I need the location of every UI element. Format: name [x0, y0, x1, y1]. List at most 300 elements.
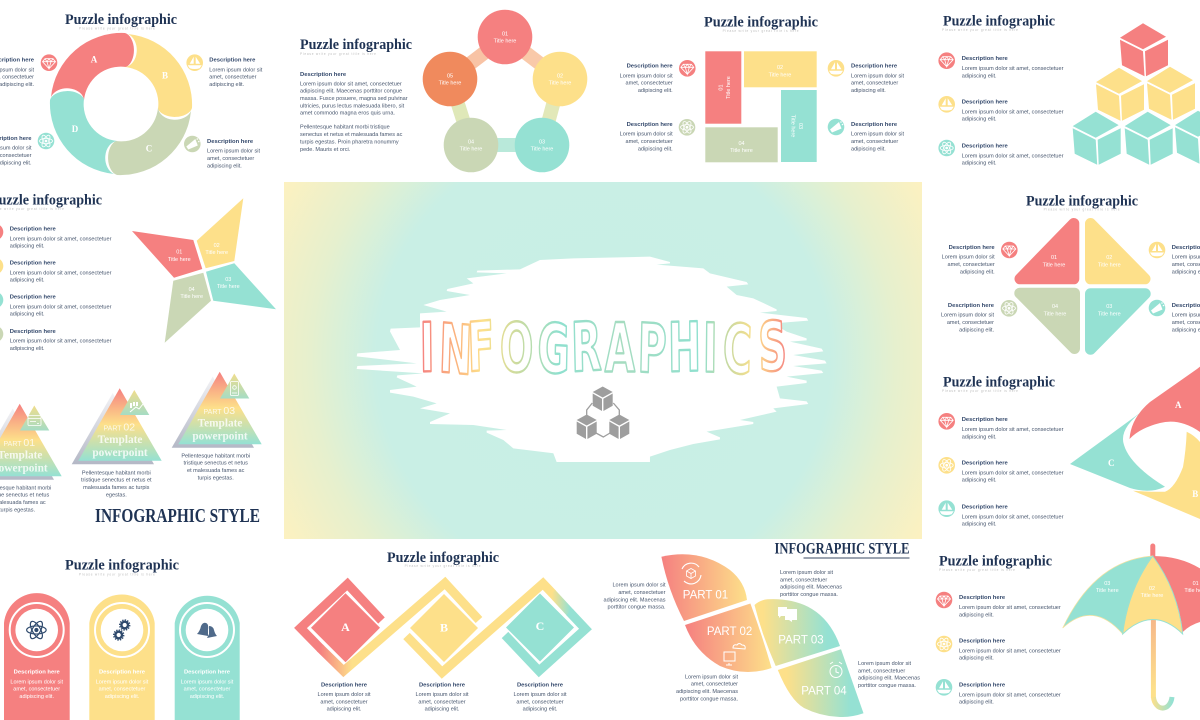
text block left top: Lorem ipsum dolor sit — [620, 73, 673, 79]
ring letters — [72, 54, 168, 154]
text block bottom right: adipiscing elit. — [207, 164, 242, 170]
text item 1: adipiscing elit. — [959, 612, 994, 618]
panel: diamond chain — [300, 550, 586, 713]
diamond C: C — [536, 619, 544, 633]
triangle part 03: Template — [198, 418, 242, 430]
text block top left: adipiscing elit. — [0, 82, 34, 88]
white brush stroke — [357, 257, 827, 462]
text block top left — [0, 58, 35, 88]
icon: ship — [186, 54, 203, 71]
circle 03 — [515, 118, 569, 172]
text block top right: amet, consectetuer — [209, 75, 257, 81]
arch red: Description here — [14, 669, 61, 675]
icon: connected cubes — [577, 386, 629, 439]
text item 3: adipiscing elit. — [10, 312, 45, 318]
circle 05 — [423, 52, 477, 106]
panel: pentagon circles — [300, 10, 587, 172]
panel: pinwheel star — [0, 192, 276, 352]
swirl A — [1130, 362, 1200, 440]
text item 2: Lorem ipsum dolor sit amet, consectetuer — [962, 470, 1064, 476]
text item 2: Description here — [962, 460, 1009, 466]
subtitle: Please write your great title is here — [723, 29, 799, 33]
text block bottom right: amet, consectetuer — [207, 156, 254, 162]
text left bottom — [941, 303, 995, 333]
quadrant 04: Title here — [1044, 312, 1066, 318]
icon: diamond — [41, 54, 57, 71]
text right: adipiscing elit. Maecenas — [858, 676, 920, 682]
icon: atom — [936, 636, 952, 652]
icon: ship — [936, 679, 952, 696]
block 01: Title here — [726, 76, 732, 99]
text item 2: Lorem ipsum dolor sit amet, consectetuer — [10, 270, 112, 276]
description: Lorem ipsum dolor sit amet, consectetuer — [300, 81, 402, 87]
quadrant 04 — [1020, 293, 1074, 348]
text item 2 — [10, 261, 112, 284]
text item 3: adipiscing elit. — [959, 700, 994, 706]
panel: rectangles puzzle — [620, 14, 904, 162]
text item 3: Lorem ipsum dolor sit amet, consectetuer — [959, 692, 1061, 698]
text item 3: Lorem ipsum dolor sit amet, consectetuer — [962, 153, 1064, 159]
icon: megaphone — [828, 119, 844, 135]
text item 1: Description here — [10, 227, 57, 233]
arch red — [4, 593, 70, 720]
text C: adipiscing elit. — [523, 707, 558, 713]
panel: cube pyramid — [938, 14, 1200, 167]
leaf part 04: PART 04 — [801, 685, 847, 697]
block 02: Title here — [769, 72, 791, 78]
text C: Lorem ipsum dolor sit — [513, 692, 567, 698]
text B: amet, consectetuer — [418, 699, 466, 705]
text item 3 — [10, 295, 112, 318]
description: senectus et netus et malesuada fames ac — [300, 132, 403, 138]
text item 3 — [962, 143, 1064, 167]
swirl letters — [1108, 400, 1198, 499]
text right — [858, 661, 920, 689]
diamond A — [311, 593, 380, 662]
text bottom — [676, 674, 738, 702]
leaf part 01: PART 01 — [683, 589, 728, 601]
text item 2: Lorem ipsum dolor sit amet, consectetuer — [959, 648, 1061, 654]
blade 03 — [206, 263, 276, 309]
text left: porttitor congue massa. — [608, 605, 666, 611]
icon: ship — [1149, 242, 1165, 258]
quadrant 01: 01 — [1051, 255, 1057, 261]
text block right top — [851, 64, 904, 94]
title: Puzzle infographic — [65, 12, 177, 28]
panel: umbrella — [936, 544, 1200, 708]
text left top: amet, consectetuer — [948, 262, 995, 268]
blade 04: Title here — [180, 294, 203, 300]
heading: INFOGRAPHIC STYLE — [95, 505, 260, 527]
text item 1: adipiscing elit. — [962, 73, 997, 79]
title: Puzzle infographic — [387, 550, 499, 566]
description — [300, 72, 408, 153]
block 03: 03 — [797, 123, 803, 129]
circle 04 — [444, 118, 498, 172]
block 02 — [744, 51, 817, 87]
text left bottom: Lorem ipsum dolor sit — [941, 313, 994, 319]
blade 01 — [132, 231, 202, 278]
diamond B — [410, 594, 478, 662]
canopy yellow: 02 — [1149, 586, 1155, 592]
circle 01: 01 — [502, 32, 508, 38]
text item 2: adipiscing elit. — [10, 278, 45, 284]
text left top: Lorem ipsum dolor sit — [942, 255, 995, 261]
panel: leaf parts — [604, 540, 920, 717]
swirl letters: B — [1192, 489, 1198, 499]
arch teal: adipiscing elit. — [190, 694, 225, 700]
block 01 — [705, 51, 741, 124]
text block top right: adipiscing elit. — [209, 82, 245, 88]
icon: atom — [1001, 300, 1017, 317]
ring segment D — [50, 91, 117, 174]
zigzag bands — [300, 583, 586, 672]
panel: arches — [4, 558, 240, 720]
text bottom: amet, consectetuer — [691, 682, 738, 688]
arch teal: Description here — [184, 669, 231, 675]
text left: Lorem ipsum dolor sit — [612, 583, 666, 589]
leaf part 03 — [754, 599, 840, 666]
circle 02: 02 — [557, 74, 563, 80]
text item 3: Lorem ipsum dolor sit amet, consectetuer — [962, 514, 1064, 520]
text block top right: Lorem ipsum dolor sit — [209, 67, 263, 73]
canopy yellow: Title here — [1141, 593, 1163, 599]
text block right top: Lorem ipsum dolor sit — [851, 73, 904, 79]
text block top right — [209, 58, 263, 88]
arch teal: Lorem ipsum dolor sit — [181, 679, 234, 685]
text item 2 — [962, 99, 1064, 123]
diamond A: A — [341, 620, 350, 634]
canopy labels 01 — [1184, 581, 1200, 594]
arch red: Lorem ipsum dolor sit — [10, 679, 63, 685]
text left: amet, consectetuer — [618, 590, 666, 596]
leaf part 02 — [685, 604, 772, 672]
text block left bottom: Description here — [627, 122, 673, 128]
text C: Description here — [517, 683, 564, 689]
arch teal: amet, consectetuer — [184, 687, 231, 693]
quadrant 01 — [1020, 224, 1074, 279]
ring letters: C — [146, 144, 152, 154]
ring segment B — [125, 34, 192, 117]
text item 2: Lorem ipsum dolor sit amet, consectetuer — [962, 109, 1064, 115]
block 04 — [705, 127, 778, 162]
text item 3 — [962, 504, 1064, 528]
icon: atom — [38, 133, 54, 149]
text B — [415, 683, 469, 713]
text block left top: adipiscing elit. — [638, 88, 673, 94]
circle 01 — [478, 10, 532, 64]
caption part 02: malesuada fames ac turpis — [83, 485, 150, 491]
blade 03: 03 — [225, 277, 231, 283]
quadrant 03: 03 — [1106, 304, 1112, 310]
title: Puzzle infographic — [300, 37, 412, 53]
quadrant 02: Title here — [1098, 262, 1121, 268]
text item 3: adipiscing elit. — [962, 522, 997, 528]
heading: INFOGRAPHIC STYLE — [774, 540, 910, 558]
text block left bottom — [620, 122, 673, 152]
text block left bottom: Lorem ipsum dolor sit — [620, 132, 673, 138]
text left top — [942, 245, 995, 275]
triangle part 03 — [172, 372, 262, 448]
subtitle: Please write your great title is here — [1044, 208, 1120, 212]
triangle part 01 — [0, 404, 62, 480]
icon: megaphone — [184, 136, 201, 152]
canopy yellow — [1123, 556, 1183, 634]
subtitle: Please write your great title is here — [300, 52, 377, 56]
circle 04: 04 — [468, 140, 474, 146]
cubes — [1073, 23, 1200, 165]
text item 3: Description here — [962, 504, 1009, 510]
blade 04 — [165, 273, 211, 343]
icon: atom — [938, 457, 955, 474]
outlined word: INFOGRAPHICS — [419, 307, 788, 392]
text block right top: amet, consectetuer — [851, 81, 898, 87]
text bottom: Lorem ipsum dolor sit — [685, 674, 738, 680]
text block right top: adipiscing elit. — [851, 88, 886, 94]
text item 3 — [959, 682, 1061, 706]
blade 02: 02 — [214, 243, 220, 249]
canopy teal: 03 — [1104, 581, 1110, 587]
icons cut off at left — [0, 224, 3, 342]
text block left top: Description here — [627, 64, 673, 70]
icon: ship — [938, 96, 955, 113]
text item 1: Lorem ipsum dolor sit amet, consectetuer — [962, 427, 1064, 433]
description: adipiscing elit. Maecenas porttitor congue — [300, 89, 402, 95]
text item 1: Description here — [962, 56, 1009, 62]
text right: porttitor congue massa. — [858, 683, 916, 689]
description: pede. Mauris et orci. — [300, 147, 351, 153]
icon: diamond — [938, 52, 955, 69]
text item 1 — [10, 227, 112, 250]
leaf part 04 — [778, 649, 864, 717]
circle 03: Title here — [531, 147, 553, 153]
panel: rounded quadrants — [941, 194, 1200, 349]
canopy red — [1153, 556, 1200, 632]
triangle part 03: powerpoint — [192, 430, 248, 442]
umbrella shaft — [1151, 620, 1156, 698]
text item 1: Description here — [959, 595, 1006, 601]
text item 4 — [10, 329, 112, 352]
blade 01: Title here — [168, 257, 191, 263]
arch red: adipiscing elit. — [19, 694, 54, 700]
text A: amet, consectetuer — [320, 699, 368, 705]
text block right bottom: adipiscing elit. — [851, 146, 886, 152]
circle 01: Title here — [494, 39, 516, 45]
text top right: adipiscing elit. Maecenas — [780, 585, 842, 591]
leaf part 02: PART 02 — [707, 626, 752, 638]
text top right: porttitor congue massa. — [780, 592, 838, 598]
text A: Lorem ipsum dolor sit — [317, 692, 371, 698]
text top right: Lorem ipsum dolor sit — [780, 570, 833, 576]
swirl C — [1070, 408, 1165, 491]
ring letters: D — [72, 124, 79, 134]
text block right bottom: Description here — [851, 122, 898, 128]
text bottom: adipiscing elit. Maecenas — [676, 689, 738, 695]
title: Puzzle infographic — [943, 374, 1055, 390]
text B: adipiscing elit. — [425, 707, 460, 713]
panel: central cover — [284, 182, 922, 539]
text item 3: Lorem ipsum dolor sit amet, consectetuer — [10, 304, 112, 310]
caption part 02 — [81, 470, 152, 498]
blade 04: 04 — [189, 287, 195, 293]
connectors — [450, 37, 560, 145]
subtitle: Please write your great title is here — [942, 28, 1019, 32]
icon: atom — [679, 119, 695, 136]
arch yellow: amet, consectetuer — [99, 687, 146, 693]
text block right top: Description here — [851, 64, 898, 70]
caption part 03: et malesuada fames ac — [187, 468, 245, 474]
caption part 03: Pellentesque habitant morbi — [181, 453, 250, 459]
triangle part 02: Template — [98, 434, 142, 446]
text block left top: amet, consectetuer — [626, 81, 673, 87]
text right: amet, consectetuer — [858, 668, 905, 674]
icon: ship — [938, 500, 955, 517]
text B: Lorem ipsum dolor sit — [415, 692, 469, 698]
text left top: adipiscing elit. — [960, 269, 995, 275]
circle 05: 05 — [447, 74, 453, 80]
text A — [317, 683, 371, 713]
panel: ring puzzle — [0, 12, 263, 175]
blade 03: Title here — [217, 284, 240, 290]
arch yellow: Description here — [99, 669, 146, 675]
text C — [513, 683, 567, 713]
leaf part 03: PART 03 — [778, 634, 824, 646]
triangle part 02: PART 02 — [104, 422, 135, 434]
description: massa. Fusce posuere, magna sed pulvinar — [300, 96, 408, 102]
arch yellow — [89, 594, 155, 720]
triangle part 02: powerpoint — [92, 447, 148, 459]
circle 03: 03 — [539, 140, 545, 146]
text item 2: Description here — [959, 638, 1006, 644]
text item 1: adipiscing elit. — [962, 434, 997, 440]
triangle part 03: PART 03 — [204, 405, 235, 417]
icon: diamond — [938, 413, 955, 430]
text left bottom: Description here — [948, 303, 995, 309]
leaf part 01 — [661, 554, 747, 621]
caption part 01: turpis egestas. — [0, 507, 35, 513]
ring letters: B — [162, 70, 168, 80]
text B: Description here — [419, 683, 466, 689]
text item 2: Description here — [962, 99, 1009, 105]
blade 02: Title here — [205, 250, 228, 256]
text right top — [1172, 245, 1200, 275]
canopy teal — [1063, 556, 1153, 634]
swirl B — [1133, 432, 1200, 522]
title: Puzzle infographic — [943, 14, 1055, 30]
umbrella tip — [1150, 544, 1155, 558]
subtitle: Please write your great title is here — [942, 389, 1019, 393]
text item 1 — [962, 417, 1064, 440]
panel: triangles style — [0, 372, 262, 527]
subtitle: Please write your great title is here — [79, 26, 156, 30]
text item 2: adipiscing elit. — [962, 117, 997, 123]
icon: atom — [938, 140, 955, 156]
block 04: 04 — [738, 141, 745, 147]
caption part 03 — [181, 453, 250, 481]
swirl letters: C — [1108, 458, 1115, 468]
text item 3: Description here — [959, 682, 1006, 688]
icon: diamond — [679, 60, 696, 77]
swirl letters: A — [1175, 400, 1182, 410]
description: Description here — [300, 72, 347, 78]
description: Pellentesque habitant morbi tristique — [300, 125, 390, 131]
text item 1: Description here — [962, 417, 1009, 423]
quadrant 03 — [1090, 294, 1145, 349]
canopy teal: Title here — [1096, 588, 1119, 594]
text block right bottom: amet, consectetuer — [851, 139, 898, 145]
caption part 02: egestas. — [106, 492, 127, 498]
text bottom: porttitor congue massa. — [680, 696, 738, 702]
subtitle: Please write your great title is here — [405, 564, 481, 568]
quadrant 04: 04 — [1052, 304, 1058, 310]
text item 3: Description here — [962, 143, 1009, 149]
text item 1 — [962, 56, 1064, 79]
subtitle: Please write your great title is here — [939, 568, 1016, 572]
circle 02: Title here — [549, 81, 571, 87]
caption part 03: turpis egestas. — [198, 475, 234, 481]
arch teal — [175, 596, 240, 720]
caption part 02: Pellentesque habitant morbi — [82, 470, 151, 476]
block 03: Title here — [790, 115, 796, 137]
title: Puzzle infographic — [939, 554, 1052, 570]
text top right: amet, consectetuer — [780, 577, 827, 583]
gradient background — [284, 182, 922, 539]
quadrant 03: Title here — [1098, 312, 1121, 318]
block 02: 02 — [777, 65, 783, 71]
text block left bottom: adipiscing elit. — [638, 146, 673, 152]
text item 3: Description here — [10, 295, 57, 301]
arch red: amet, consectetuer — [13, 687, 60, 693]
text item 4: adipiscing elit. — [10, 346, 45, 352]
circle 05: Title here — [439, 81, 461, 87]
blade 02 — [197, 198, 243, 268]
text item 4: Description here — [10, 329, 57, 335]
text block left bottom: amet, consectetuer — [626, 139, 673, 145]
triangle part 01: PART 01 — [4, 437, 35, 449]
quadrant 01: Title here — [1043, 262, 1065, 268]
text item 1: adipiscing elit. — [10, 244, 45, 250]
text left bottom: amet, consectetuer — [947, 320, 994, 326]
text block bottom right — [207, 139, 260, 170]
text A: Description here — [321, 683, 368, 689]
text item 1: Lorem ipsum dolor sit amet, consectetuer — [10, 236, 112, 242]
blade 01: 01 — [176, 250, 182, 256]
text item 3: adipiscing elit. — [962, 161, 997, 167]
text item 1: Lorem ipsum dolor sit amet, consectetuer — [959, 605, 1061, 611]
text A: adipiscing elit. — [327, 707, 362, 713]
text C: amet, consectetuer — [516, 699, 564, 705]
text right bottom — [1172, 303, 1200, 333]
icon: diamond — [936, 592, 952, 608]
canopy labels 01: 01 — [1193, 581, 1199, 587]
title: Puzzle infographic — [65, 558, 179, 574]
description: amet commodo magna eros quis urna. — [300, 111, 395, 117]
block 03 — [781, 90, 817, 162]
text item 2 — [962, 460, 1064, 484]
arch yellow: adipiscing elit. — [105, 694, 140, 700]
quadrant 02: 02 — [1106, 255, 1112, 261]
text left top: Description here — [949, 245, 995, 251]
text item 1 — [959, 595, 1061, 618]
umbrella hook — [1153, 697, 1172, 708]
text item 2 — [959, 638, 1061, 662]
icon: diamond — [1001, 242, 1018, 258]
text block bottom left — [0, 136, 32, 166]
diamond C — [506, 594, 574, 662]
text item 4: Lorem ipsum dolor sit amet, consectetuer — [10, 339, 112, 345]
text block left top — [620, 64, 673, 94]
triangle part 02 — [72, 388, 162, 464]
